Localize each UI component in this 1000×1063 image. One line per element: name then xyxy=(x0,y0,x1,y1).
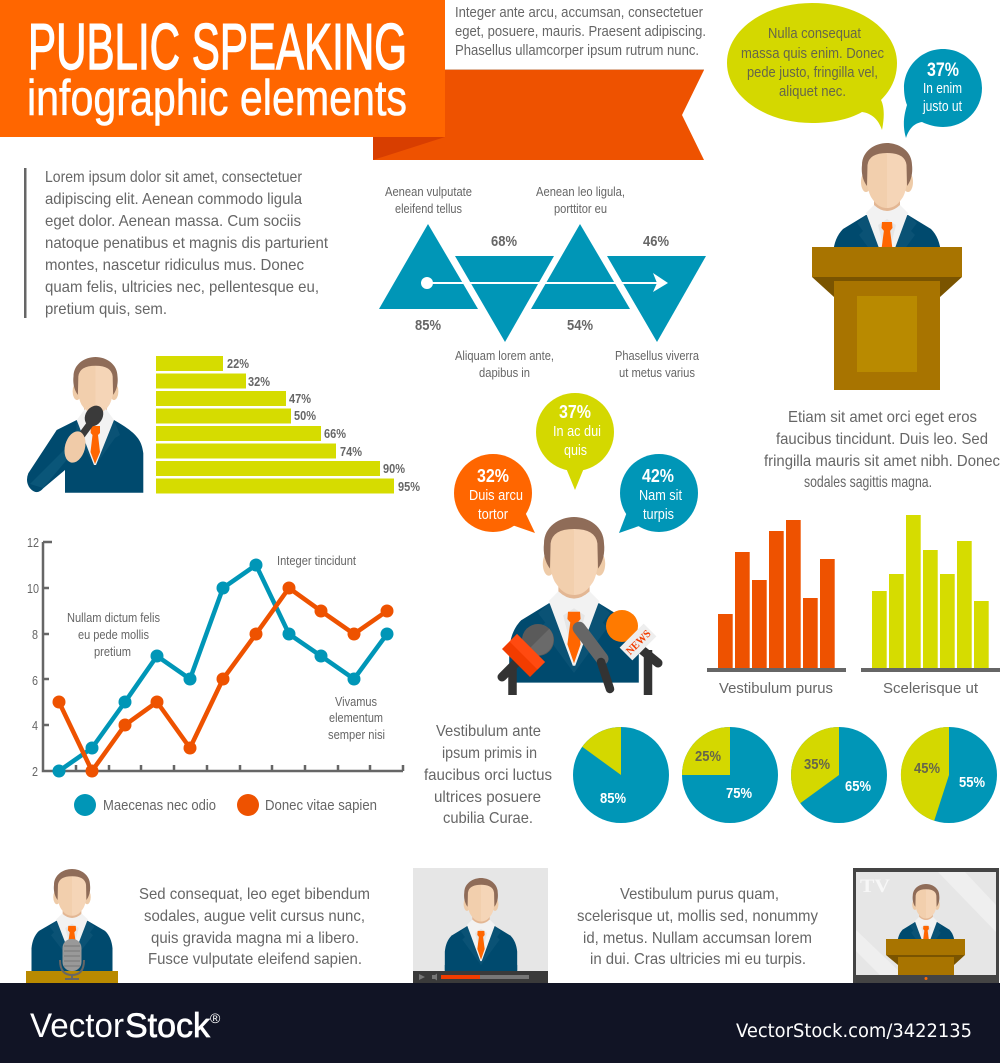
line chart: 12 xyxy=(27,535,39,550)
right paragraph: sodales sagittis magna. xyxy=(804,474,932,491)
line chart: 6 xyxy=(32,673,38,688)
bottom text right: in dui. Cras ultricies mi eu turpis. xyxy=(590,951,806,968)
line chart: Nullam dictum felis xyxy=(67,611,160,625)
pie chart 85%: 85% xyxy=(600,790,626,807)
speech bubble: teal center: 42% xyxy=(642,466,674,486)
left intro paragraph: natoque penatibus et magnis dis parturient xyxy=(45,235,329,252)
bottom text left: Fusce vulputate eleifend sapien. xyxy=(148,951,362,968)
line chart: elementum xyxy=(329,711,383,725)
left intro paragraph: Lorem ipsum dolor sit amet, consectetuer xyxy=(45,169,303,186)
column chart: green: Scelerisque ut xyxy=(883,680,979,697)
pie chart text: ultrices posuere xyxy=(434,789,541,806)
line chart: eu pede mollis xyxy=(78,628,149,642)
horizontal bar chart: 22% xyxy=(227,357,249,371)
speech bubble: orange center: Duis arcu xyxy=(469,488,523,504)
top intro text: Phasellus ullamcorper ipsum rutrum nunc. xyxy=(455,43,699,59)
speech bubble: green center: In ac dui xyxy=(553,424,601,440)
watermark footer band: VectorStock.com/3422135 xyxy=(736,1020,972,1042)
bottom text right: scelerisque ut, mollis sed, nonummy xyxy=(577,908,818,925)
line chart: 8 xyxy=(32,627,38,642)
top intro text: Integer ante arcu, accumsan, consectetuer xyxy=(455,5,703,21)
horizontal bar chart: 90% xyxy=(383,462,405,476)
line chart legend: Donec vitae sapien xyxy=(265,798,377,814)
speech bubble: green top: Nulla consequat xyxy=(768,26,861,42)
bottom text right: id, metus. Nullam accumsan lorem xyxy=(583,930,812,947)
watermark footer band xyxy=(0,983,1000,1063)
pie chart 65% xyxy=(791,727,887,823)
bottom text left: quis gravida magna mi a libero. xyxy=(151,930,359,947)
right paragraph: faucibus tincidunt. Duis leo. Sed xyxy=(776,431,988,448)
triangle process chart: Phasellus viverra xyxy=(615,349,699,363)
speech bubble: green center xyxy=(536,393,614,490)
pie chart text: faucibus orci luctus xyxy=(424,767,552,784)
left intro paragraph xyxy=(24,168,329,318)
speech bubble: teal top xyxy=(904,49,982,138)
left intro paragraph: quam felis, ultricies nec, pellentesque eu, xyxy=(45,279,319,296)
speech bubble: teal center: turpis xyxy=(643,507,674,523)
triangle process chart: 85% xyxy=(415,317,441,334)
speaker with studio microphone xyxy=(26,869,118,983)
watermark footer band: Stock xyxy=(125,1007,211,1045)
column chart: green xyxy=(861,515,1000,697)
line chart: 10 xyxy=(27,581,39,596)
speech bubble: green top xyxy=(727,3,897,130)
speaker at press conference with microphones xyxy=(502,517,658,695)
right paragraph xyxy=(764,409,1000,491)
column chart: orange xyxy=(707,520,846,697)
triangle process chart: porttitor eu xyxy=(554,202,607,216)
pie chart 65%: 35% xyxy=(804,756,830,773)
TV screen with speaker: TV xyxy=(860,876,890,897)
pie chart text: ipsum primis in xyxy=(442,745,537,762)
triangle process chart: dapibus in xyxy=(479,366,530,380)
video player with speaker xyxy=(413,868,548,983)
horizontal bar chart: 32% xyxy=(248,375,270,389)
line chart legend: Maecenas nec odio xyxy=(103,798,216,814)
title banner: PUBLIC SPEAKING xyxy=(28,10,407,83)
speech bubble: teal top: 37% xyxy=(927,60,959,81)
speech bubble: orange center: 32% xyxy=(477,466,509,486)
line chart: 4 xyxy=(32,718,38,733)
left intro paragraph: pretium quis, sem. xyxy=(45,301,167,318)
pie chart 85% xyxy=(573,727,669,823)
ribbon behind header xyxy=(373,69,704,160)
speech bubble: green center: quis xyxy=(564,443,587,459)
pie chart text: Vestibulum ante xyxy=(436,723,541,740)
pie chart 75% xyxy=(682,727,778,823)
triangle process chart: Aenean leo ligula, xyxy=(536,185,625,199)
speech bubble: teal center xyxy=(619,454,698,533)
column chart: orange: Vestibulum purus xyxy=(719,680,833,697)
speech bubble: orange center xyxy=(454,454,535,533)
top intro text: eget, posuere, mauris. Praesent adipiscing. xyxy=(455,24,706,40)
top intro text xyxy=(455,5,706,59)
speaker at podium xyxy=(812,143,962,390)
pie chart 75%: 75% xyxy=(726,785,752,802)
right paragraph: Etiam sit amet orci eget eros xyxy=(788,409,977,426)
TV screen with speaker xyxy=(853,868,999,983)
triangle process chart: eleifend tellus xyxy=(395,202,462,216)
horizontal bar chart: 50% xyxy=(294,409,316,423)
speaker at press conference with microphones: NEWS xyxy=(624,628,654,658)
pie chart 55%: 55% xyxy=(959,774,985,791)
line chart: Integer tincidunt xyxy=(277,554,356,568)
pie chart 75%: 25% xyxy=(695,748,721,765)
bottom text right xyxy=(577,886,818,968)
triangle process chart: ut metus varius xyxy=(619,366,695,380)
bottom text right: Vestibulum purus quam, xyxy=(620,886,779,903)
horizontal bar chart: 47% xyxy=(289,392,311,406)
triangle process chart: 46% xyxy=(643,233,669,250)
bottom text left xyxy=(139,886,370,968)
triangle process chart: 54% xyxy=(567,317,593,334)
title banner xyxy=(0,0,445,137)
horizontal bar chart: 95% xyxy=(398,480,420,494)
triangle process chart: 68% xyxy=(491,233,517,250)
triangle process chart xyxy=(379,185,706,380)
speech bubble: orange center: tortor xyxy=(478,507,508,523)
line chart: pretium xyxy=(94,645,131,659)
pie chart 65%: 65% xyxy=(845,778,871,795)
pie chart text xyxy=(424,723,552,827)
speech bubble: green top: massa quis enim. Donec xyxy=(741,46,884,62)
bottom text left: sodales, augue velit cursus nunc, xyxy=(144,908,365,925)
speech bubble: teal top: justo ut xyxy=(922,99,962,115)
left intro paragraph: adipiscing elit. Aenean commodo ligula xyxy=(45,191,302,208)
speech bubble: green top: pede justo, fringilla vel, xyxy=(747,65,878,81)
line chart legend xyxy=(74,794,377,816)
speaker with handheld microphone xyxy=(27,357,143,493)
triangle process chart: Aenean vulputate xyxy=(385,185,472,199)
pie chart 55% xyxy=(901,727,997,823)
speech bubble: teal center: Nam sit xyxy=(639,488,682,504)
title banner: infographic elements xyxy=(27,70,407,126)
watermark footer band: ® xyxy=(210,1010,221,1026)
line chart: Vivamus xyxy=(335,695,377,709)
pie chart text: cubilia Curae. xyxy=(443,810,533,827)
line chart xyxy=(27,535,403,779)
watermark footer band: Vector xyxy=(30,1007,124,1045)
line chart: semper nisi xyxy=(328,728,385,742)
left intro paragraph: montes, nascetur ridiculus mus. Donec xyxy=(45,257,304,274)
speech bubble: green top: aliquet nec. xyxy=(779,84,846,100)
speech bubble: green center: 37% xyxy=(559,402,591,422)
triangle process chart: Aliquam lorem ante, xyxy=(455,349,554,363)
bottom text left: Sed consequat, leo eget bibendum xyxy=(139,886,370,903)
pie chart 55%: 45% xyxy=(914,760,940,777)
horizontal bar chart xyxy=(156,356,420,494)
horizontal bar chart: 74% xyxy=(340,445,362,459)
speech bubble: teal top: In enim xyxy=(923,81,962,97)
line chart: 2 xyxy=(32,764,38,779)
horizontal bar chart: 66% xyxy=(324,427,346,441)
left intro paragraph: eget dolor. Aenean massa. Cum sociis xyxy=(45,213,301,230)
